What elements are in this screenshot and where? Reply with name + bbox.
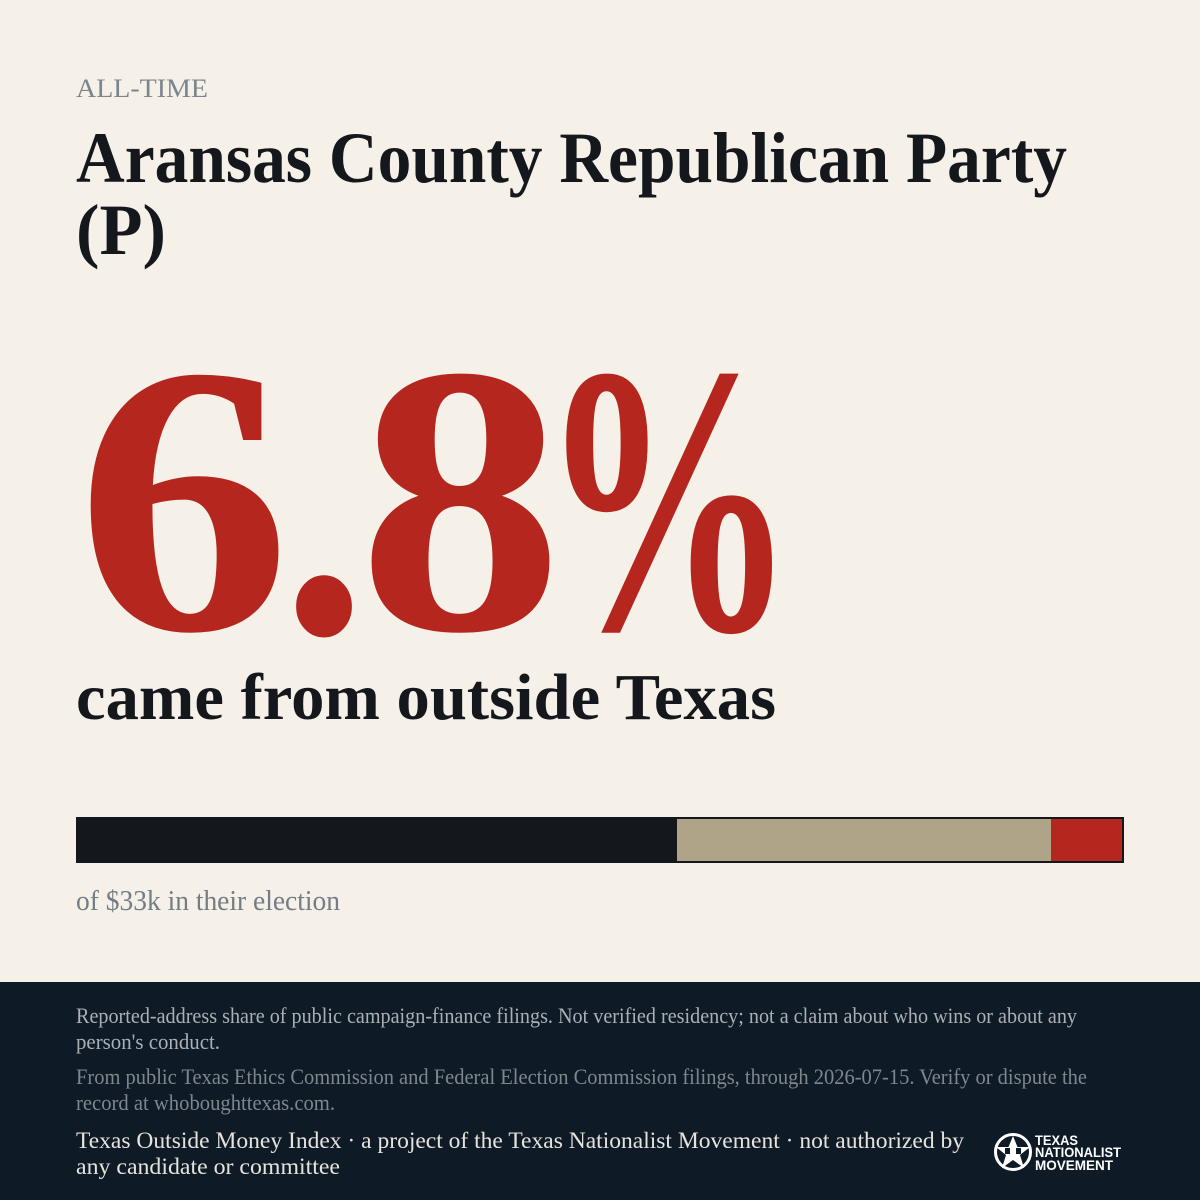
big percentage: %	[540, 288, 796, 713]
big percentage: .	[281, 291, 367, 716]
attribution: Texas Outside Money Index · a project of the Texas Nationalist Movement · not authorized by	[76, 1128, 964, 1153]
big percentage	[76, 288, 796, 716]
source note	[76, 1064, 1087, 1115]
source note: record at whoboughttexas.com.	[76, 1090, 335, 1115]
bar caption: of $33k in their election	[76, 886, 340, 917]
methodology note: person's conduct.	[76, 1029, 220, 1054]
attribution: any candidate or committee	[76, 1154, 340, 1179]
methodology note	[76, 1003, 1077, 1054]
title: Aransas County Republican Party	[76, 118, 1067, 198]
logo wordmark	[1035, 1133, 1122, 1173]
logo: Texas Nationalist Movement	[996, 1133, 1122, 1173]
big percentage: 8	[358, 288, 563, 713]
footer panel	[0, 982, 1200, 1200]
eyebrow label: ALL-TIME	[76, 74, 208, 103]
methodology note: Reported-address share of public campaign-finance filings. Not verified residency; not a claim about who wins or about any	[76, 1003, 1077, 1028]
title	[76, 118, 1067, 270]
logo wordmark: MOVEMENT	[1035, 1158, 1114, 1173]
logo wordmark: NATIONALIST	[1035, 1145, 1122, 1160]
big percentage: 6	[76, 288, 291, 713]
attribution	[76, 1128, 964, 1179]
icon: star badge	[996, 1134, 1030, 1170]
subheading: came from outside Texas	[76, 661, 776, 734]
logo wordmark: TEXAS	[1035, 1133, 1078, 1148]
source note: From public Texas Ethics Commission and Federal Election Commission filings, through 2026-07-15. Verify or dispute the	[76, 1064, 1087, 1089]
title: (P)	[76, 190, 166, 270]
stacked share bar	[76, 817, 1124, 863]
